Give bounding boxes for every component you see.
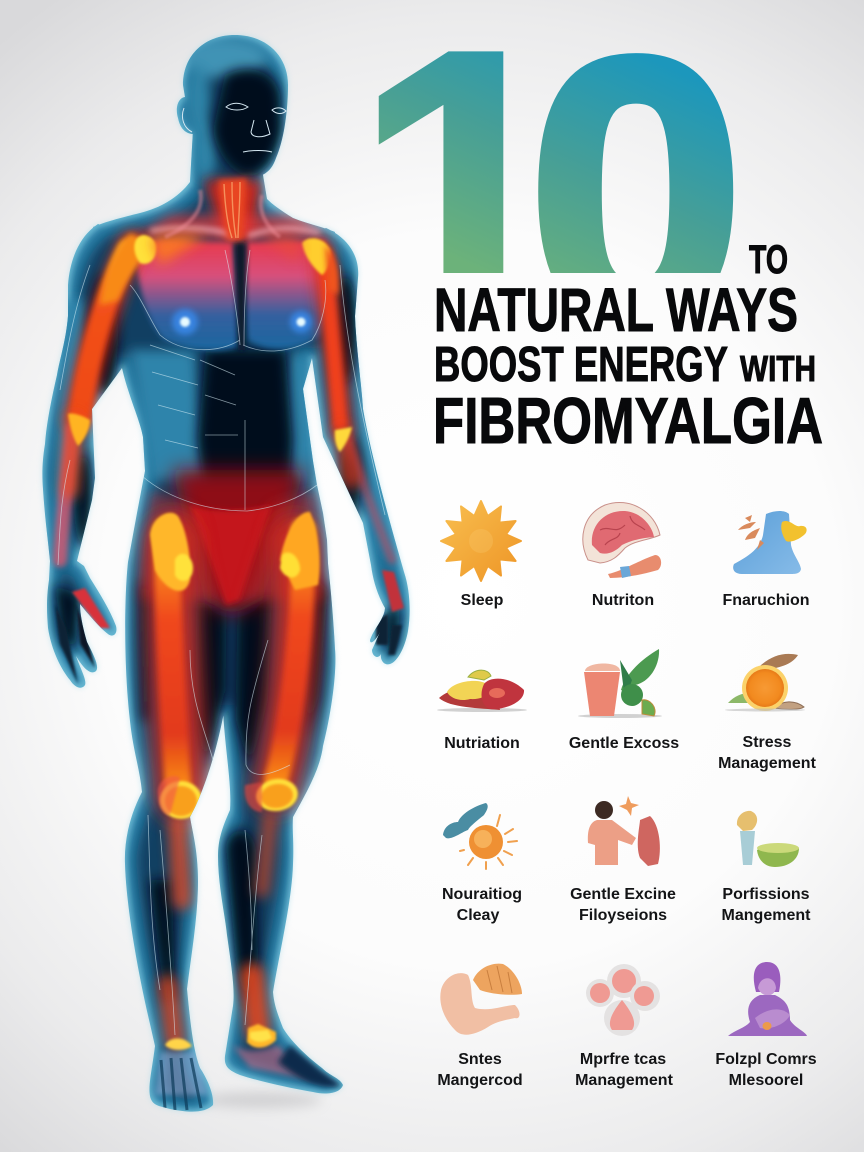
body interior [42, 35, 410, 1112]
tip: Sleep: Sleep [461, 592, 504, 609]
collar bone pale band [150, 228, 320, 236]
icon: brain and arm [583, 502, 661, 578]
belly dark red [172, 470, 305, 615]
tip: Nutriation: Nutriation [444, 735, 520, 752]
tip: Sleep [441, 501, 521, 609]
tip: Gentle Excoss: Gentle Excoss [569, 735, 679, 752]
pelvis translucent red [190, 505, 272, 605]
pectoral right [244, 240, 329, 349]
tip: Stress Management (row 2): Management [718, 755, 817, 772]
hand tones [55, 570, 404, 684]
tip: Stress Management (row 2): Stress [743, 734, 792, 751]
tip: Fnaruchion: Fnaruchion [722, 592, 810, 609]
body outer halo [42, 35, 410, 1112]
icon: glass and green bowl [737, 811, 799, 867]
fine anatomy lines [58, 250, 385, 1035]
tip: Gentle Excine [570, 796, 676, 924]
upper arm bones [60, 245, 392, 560]
big number 10 [378, 51, 734, 273]
icon: sun with blue cloud [443, 803, 517, 869]
title heading: WITH [740, 348, 816, 389]
sternum dark [235, 242, 246, 350]
icon: resting body and shell [440, 964, 522, 1035]
thigh bones [167, 530, 303, 1040]
neck muscle fibers [165, 178, 280, 240]
face features [182, 103, 286, 152]
icon: orange with almond [725, 654, 805, 712]
tip: Nouraitiog Cleay: Nouraitiog [442, 886, 522, 903]
rib and side tones [50, 300, 395, 560]
tip: Fnaruchion [722, 511, 810, 609]
human body figure with pain highlights [40, 33, 412, 1114]
shoulder joint glow [100, 233, 339, 305]
tip: Mprfre tcas Management: Management [575, 1072, 674, 1089]
icon: blue flask with heart and leaves [733, 511, 807, 574]
icon: sun [441, 501, 521, 581]
title heading [433, 238, 823, 457]
tip: Nutrition [583, 502, 661, 609]
tip: Porfissions Mangement: Porfissions [722, 886, 810, 903]
elbow joints [68, 413, 352, 452]
tip: Gentle Excoss [569, 649, 679, 752]
tip: Folzpl Comrs Mlesoorel: Mlesoorel [729, 1072, 803, 1089]
tip: Porfissions Mangement [722, 811, 811, 924]
skull and cheek lighter tones [183, 38, 267, 180]
icon: person with muscle [588, 796, 660, 866]
icon: meditating woman [728, 962, 807, 1036]
tip: Nouraitiog Cleay: Cleay [457, 907, 499, 924]
tip: Porfissions Mangement: Mangement [722, 907, 811, 924]
tip: Gentle Excine: Gentle Excine [570, 886, 676, 903]
tip: Sntes Mangercod: Mangercod [437, 1072, 523, 1089]
floor shadow under feet [202, 1092, 322, 1108]
tip: Sntes Mangercod [437, 964, 523, 1089]
tip: Stress Management (row 2) [718, 654, 817, 772]
pectoral left [133, 240, 240, 350]
tip: Sntes Mangercod: Sntes [458, 1051, 502, 1068]
tip: Mprfre tcas Management [575, 964, 674, 1089]
tip: Nouraitiog Cleay [442, 803, 522, 924]
tip: Nutrition: Nutriton [592, 592, 654, 609]
tip: Mprfre tcas Management: Mprfre tcas [580, 1051, 666, 1068]
title heading: TO [749, 238, 788, 282]
icon: cup and greens [578, 649, 662, 718]
title heading: BOOST ENERGY [434, 338, 728, 392]
inner shading following outline [42, 35, 410, 1112]
icon: food bowls [437, 670, 527, 712]
tip: Folzpl Comrs Mlesoorel [715, 962, 817, 1089]
dark navy regions [55, 69, 400, 1010]
feet tones [155, 1045, 342, 1110]
hip joints [150, 512, 320, 591]
tip: Nutriation [437, 670, 527, 752]
ankle joints [165, 1024, 276, 1050]
knee joints [158, 776, 300, 819]
shoulder and neck glow [205, 180, 262, 240]
nipple glow points [172, 309, 312, 335]
tip: Gentle Excine: Filoyseions [579, 907, 667, 924]
tip: Folzpl Comrs Mlesoorel: Folzpl Comrs [715, 1051, 817, 1068]
icon: four cell circles [586, 964, 660, 1036]
